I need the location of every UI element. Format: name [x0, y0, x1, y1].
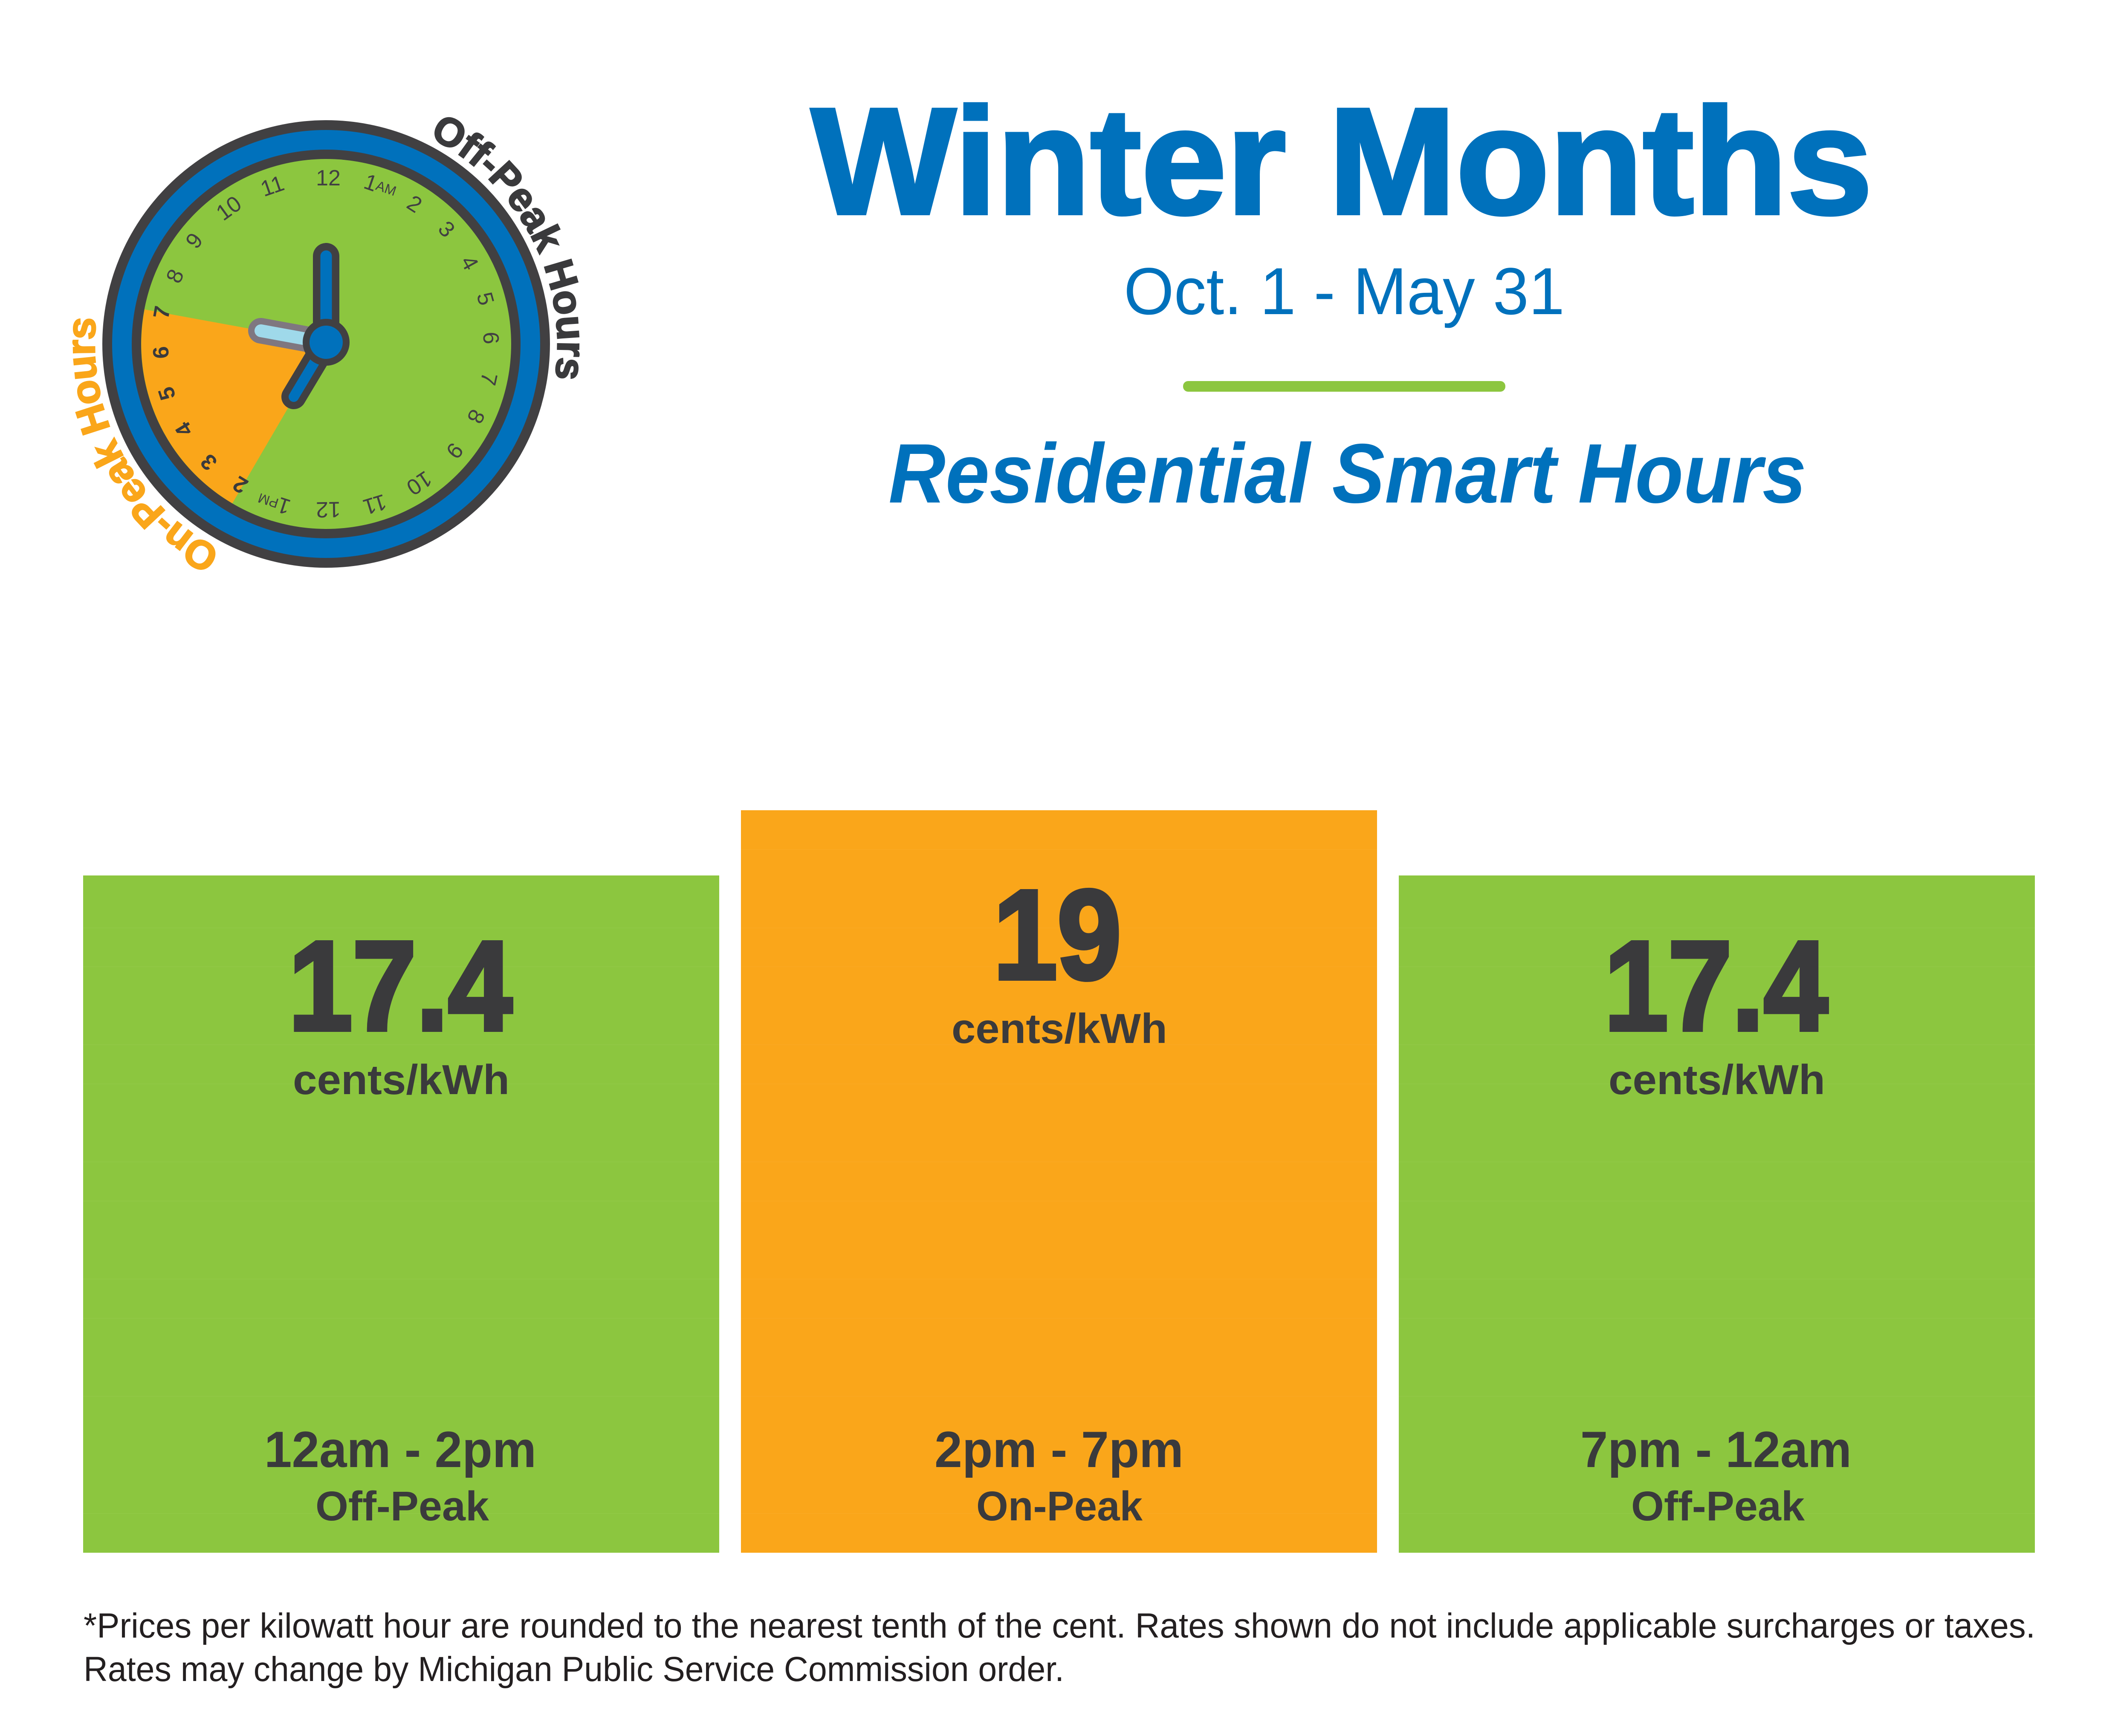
rate value: 19 — [993, 864, 1121, 1006]
green divider — [1183, 381, 1505, 392]
clock hub — [303, 319, 350, 366]
clock hour numerals: 7 — [149, 304, 175, 321]
clock hour numerals: 2 — [402, 191, 426, 218]
clock outer ring — [102, 120, 550, 568]
clock hour numerals: 5 — [472, 289, 499, 308]
rate value: 17.4 — [289, 915, 513, 1057]
clock second hand: light blue — [261, 331, 326, 343]
footnote: *Prices per kilowatt hour are rounded to the nearest tenth of the cent. Rates shown do not include applicable surcharges or taxes. — [84, 1606, 2035, 1645]
panel: on-peak 2pm to 7pm — [741, 810, 1377, 1553]
footnote: Rates may change by Michigan Public Service Commission order. — [84, 1650, 1064, 1689]
clock hour numerals: 3 — [433, 217, 460, 242]
period label: Off-Peak — [315, 1483, 489, 1529]
clock hour numerals: 1PM — [255, 486, 294, 519]
clock hour numerals: 11 — [258, 171, 287, 202]
clock hour numerals: 4 — [456, 251, 483, 274]
time range: 12am - 2pm — [264, 1421, 536, 1478]
clock hour numerals: 8 — [162, 266, 189, 287]
clock hour numerals: 10 — [402, 466, 436, 500]
time range: 2pm - 7pm — [935, 1421, 1183, 1478]
clock hour numerals: 7 — [475, 370, 502, 387]
rate unit: cents/kWh — [952, 1005, 1167, 1052]
rate unit: cents/kWh — [1609, 1056, 1825, 1103]
subtitle: Residential Smart Hours — [888, 426, 1806, 520]
clock: smart hours dial — [58, 105, 594, 582]
arc label: On-Peak Hours: On-Peak Hours — [58, 316, 225, 582]
rate unit: cents/kWh — [293, 1056, 509, 1103]
clock hour numerals: 10 — [212, 191, 246, 225]
clock hour numerals: 4 — [171, 417, 198, 441]
clock face: off-peak green — [141, 159, 511, 529]
panel: off-peak 7pm to 12am — [1399, 875, 2035, 1553]
clock wedge: on-peak orange — [141, 309, 326, 503]
clock hour numerals: 2 — [229, 471, 252, 498]
clock hour numerals: 8 — [462, 405, 489, 428]
clock hour numerals — [148, 166, 503, 522]
footnote — [84, 1606, 2035, 1689]
clock hour numerals: 11 — [360, 489, 389, 520]
clock hour numerals: 6 — [478, 332, 503, 344]
date range: Oct. 1 - May 31 — [1124, 254, 1565, 329]
clock hour hand — [294, 343, 326, 397]
panel: off-peak 12am to 2pm — [83, 875, 719, 1553]
clock hour numerals: 3 — [196, 449, 222, 475]
clock hour numerals: 6 — [148, 346, 174, 359]
period label: On-Peak — [976, 1483, 1143, 1529]
time range: 7pm - 12am — [1580, 1421, 1852, 1478]
clock minute hand — [313, 256, 339, 343]
clock hour numerals: 9 — [441, 438, 468, 463]
clock hour numerals: 9 — [181, 228, 208, 253]
clock hour numerals: 12 — [316, 166, 341, 191]
period label: Off-Peak — [1631, 1483, 1805, 1529]
arc label: Off-Peak Hours: Off-Peak Hours — [425, 105, 594, 382]
clock hour numerals: 12 — [316, 497, 341, 522]
clock hour numerals: 1AM — [361, 169, 400, 203]
rate value: 17.4 — [1604, 915, 1829, 1057]
clock hour numerals: 5 — [153, 384, 181, 403]
title: Winter Months — [811, 77, 1872, 246]
